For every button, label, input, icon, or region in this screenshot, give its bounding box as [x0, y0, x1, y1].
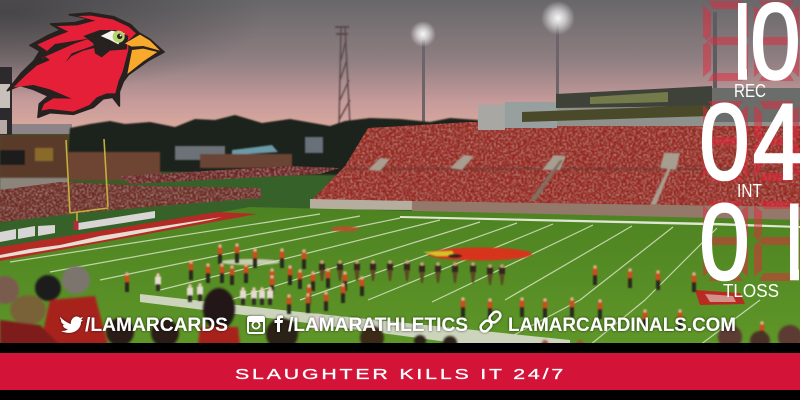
end zone with lettering: [0, 212, 257, 261]
logo: Lamar cardinal: [7, 13, 164, 117]
grass embankment: [0, 176, 330, 250]
stat: INT: [700, 82, 800, 203]
beak upper: [125, 35, 160, 51]
digit 0: 0: [700, 182, 749, 303]
goal post: [66, 139, 108, 230]
stand portals and aisles: [368, 153, 680, 205]
midfield logo: [220, 226, 532, 265]
ghost segments row 2: [703, 101, 799, 181]
icon: instagram: [248, 317, 264, 333]
wall below stands: [310, 199, 412, 210]
foreground crowd: [0, 266, 800, 351]
white sideline banners: [0, 211, 155, 242]
football field: [0, 207, 800, 345]
far sideline: [400, 216, 800, 228]
press box: [478, 86, 800, 130]
dark feather lines: [32, 38, 100, 66]
tree line: [68, 115, 480, 175]
radio tower: [335, 27, 350, 125]
near end zone: [695, 290, 745, 305]
crowd behind end zone: [0, 166, 340, 222]
stands crowd: [312, 120, 800, 208]
handle: twitter: /LAMARCARDS: [85, 315, 228, 336]
black mask: [83, 30, 128, 57]
red plumage: [13, 16, 136, 112]
sky: [0, 0, 800, 135]
ground base: [0, 130, 800, 345]
handle: facebook: /LAMARATHLETICS: [288, 315, 468, 336]
stand walkway: [345, 168, 800, 170]
banner text: SLAUGHTER KILLS IT 24/7: [235, 366, 566, 383]
ghost segments row 3: [703, 201, 799, 281]
yard lines: [10, 214, 760, 345]
icon: link: [479, 310, 502, 333]
label: REC: [734, 81, 766, 101]
near sideline: [140, 294, 570, 345]
label: TLOSS: [723, 281, 779, 301]
stat: REC: [703, 0, 800, 102]
eye iris: [113, 31, 125, 43]
logo outline: [7, 13, 164, 117]
distant buildings: [0, 135, 323, 190]
bottom black band: [0, 343, 800, 400]
social row: [60, 310, 736, 336]
icon: twitter: [60, 317, 83, 333]
eye white: [101, 31, 125, 44]
beak lower: [127, 49, 157, 74]
stat: TLOSS: [702, 201, 799, 297]
icon: facebook: [274, 315, 283, 332]
website: LAMARCARDINALS.COM: [508, 315, 736, 336]
marching band: [125, 243, 764, 341]
label: INT: [737, 181, 762, 201]
light poles: [410, 1, 717, 122]
ghost segments row 1: [703, 1, 799, 81]
red banner: [0, 353, 800, 390]
digit 0: 0: [700, 82, 749, 203]
left edge building and sign: [0, 67, 72, 135]
